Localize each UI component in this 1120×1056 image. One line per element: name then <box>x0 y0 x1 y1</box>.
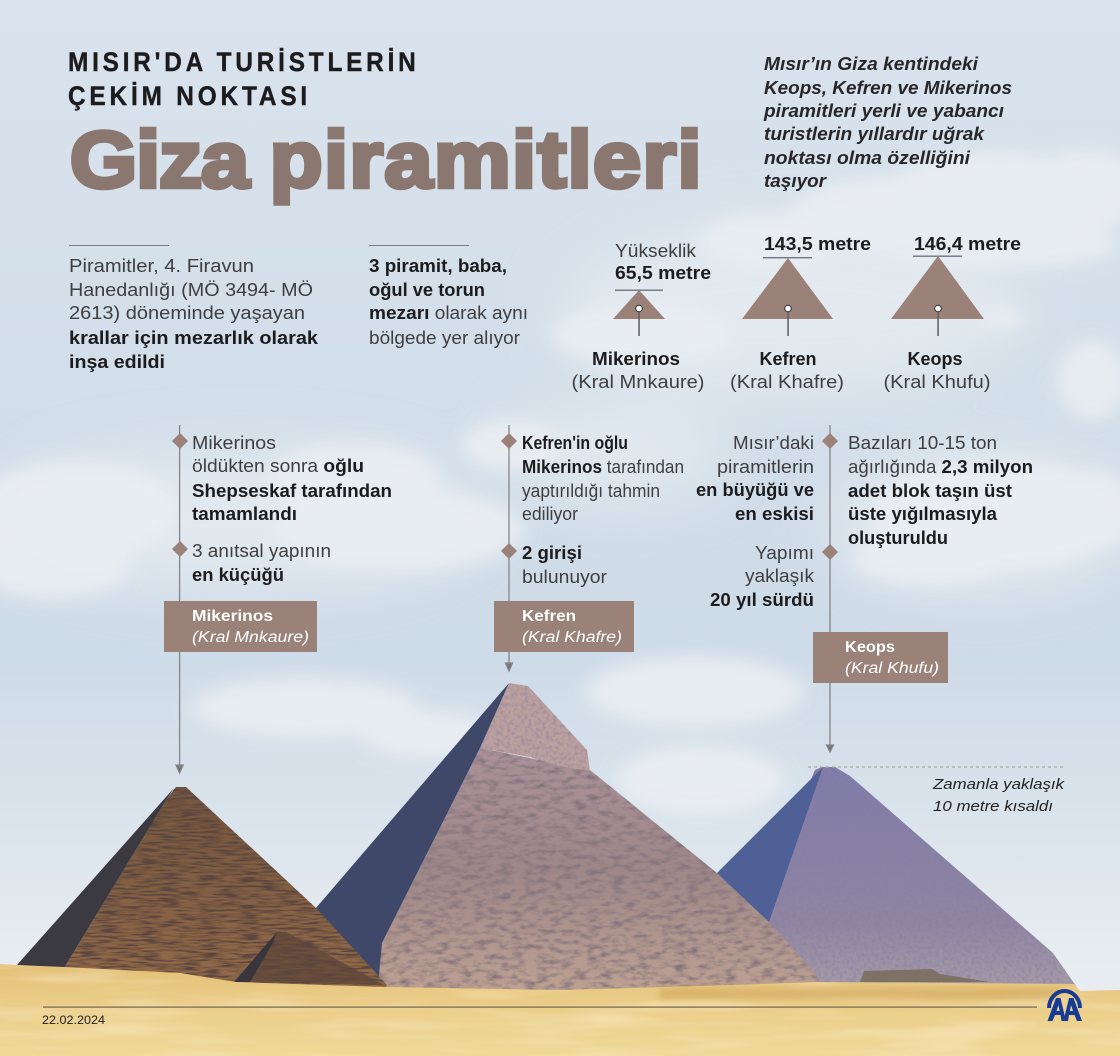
arrow down to Kefren <box>506 425 512 671</box>
text block: three pyramids: oğul ve torun <box>369 279 485 300</box>
intro paragraph: noktası olma özelliğini <box>764 148 971 168</box>
timeline: Mikerinos: Shepseskaf tarafından <box>192 481 392 501</box>
height comparison: Keops: Keops <box>908 348 962 369</box>
label box: Kefren: Kefren <box>522 608 576 625</box>
small satellite pyramid <box>250 932 384 985</box>
text block: dynasty <box>69 245 319 372</box>
main heading: Giza <box>70 115 250 204</box>
label box: Mikerinos: (Kral Mnkaure) <box>192 629 309 646</box>
Keops shadow face <box>717 767 823 930</box>
footer rule <box>43 1006 1037 1008</box>
callout: height loss: Zamanla yaklaşık <box>932 776 1066 793</box>
height comparison: Mikerinos: (Kral Mnkaure) <box>572 372 704 392</box>
height comparison: Kefren: (Kral Khafre) <box>730 372 844 392</box>
height comparison: Keops: (Kral Khufu) <box>884 372 990 392</box>
title <box>68 48 703 204</box>
intro paragraph: piramitleri yerli ve yabancı <box>763 101 1004 121</box>
timeline: Mikerinos: Mikerinos <box>192 433 276 453</box>
timeline: Kefren <box>494 425 684 671</box>
intro paragraph: turistlerin yıllardır uğrak <box>764 124 985 144</box>
background: clouds <box>0 150 1120 815</box>
callout: height loss: 10 metre kısaldı <box>933 798 1053 815</box>
timeline: Keops: en büyüğü ve <box>696 480 814 500</box>
darker sand band near horizon <box>660 988 1060 999</box>
timeline: Keops: Bazıları 10-15 ton <box>848 433 997 453</box>
text block: three pyramids: 3 piramit, baba, <box>369 255 507 276</box>
timeline: Kefren: 2 girişi <box>522 543 582 563</box>
label box: Mikerinos <box>164 601 317 652</box>
satellite shadow <box>234 932 277 982</box>
height comparison: Kefren: 143,5 metre <box>764 233 871 254</box>
timeline: Keops: Yapımı <box>755 543 814 563</box>
timeline: Keops: yaklaşık <box>745 566 815 586</box>
icon: AA logo <box>1048 991 1082 1021</box>
height comparison: Mikerinos: Yükseklik <box>615 241 697 261</box>
timeline: Keops: 20 yıl sürdü <box>710 590 814 610</box>
intro paragraph: Keops, Kefren ve Mikerinos <box>764 78 1012 98</box>
text block: dynasty: krallar için mezarlık olarak <box>69 327 319 348</box>
text block: dynasty: 2613) döneminde yaşayan <box>69 302 305 323</box>
timeline: Mikerinos: tamamlandı <box>192 504 297 524</box>
timeline: Kefren: Kefren'in oğlu <box>522 433 628 453</box>
text block: three pyramids: bölgede yer alıyor <box>369 327 520 348</box>
small ruins at foot of Keops <box>860 969 990 982</box>
timeline: Mikerinos: en küçüğü <box>192 565 284 585</box>
pyramid: Kefren <box>316 683 822 992</box>
timeline: Mikerinos: öldükten sonra oğlu <box>192 456 364 476</box>
label box: Kefren <box>494 601 634 652</box>
height comparison: Kefren <box>730 233 871 392</box>
main heading: piramitleri <box>270 115 703 204</box>
timeline: Keops: Mısır’daki <box>733 433 814 453</box>
timeline: Keops: üste yığılmasıyla <box>848 504 998 524</box>
kicker line 2: ÇEKİM NOKTASI <box>68 82 307 111</box>
timeline: Mikerinos: 3 anıtsal yapının <box>192 541 331 561</box>
kicker line 1: MISIR'DA TURİSTLERİN <box>68 48 416 77</box>
label box: Keops: (Kral Khufu) <box>845 660 939 677</box>
label box: Keops: Keops <box>845 639 895 656</box>
text block: dynasty: Hanedanlığı (MÖ 3494- MÖ <box>69 279 313 300</box>
arrow down to Keops <box>826 425 834 752</box>
timeline: Mikerinos <box>164 425 392 773</box>
height comparison: Mikerinos: Mikerinos <box>592 348 680 369</box>
height comparison: Keops: 146,4 metre <box>914 233 1021 254</box>
text block: dynasty: Piramitler, 4. Firavun <box>69 255 254 276</box>
height comparison: Mikerinos: 65,5 metre <box>615 262 711 283</box>
text block: dynasty: inşa edildi <box>69 351 165 372</box>
timeline: Kefren: yaptırıldığı tahmin <box>522 481 660 501</box>
arrow down to Mikerinos <box>176 425 183 773</box>
Kefren limestone cap <box>480 683 590 771</box>
Kefren shadow face <box>316 683 509 985</box>
timeline: Keops: piramitlerin <box>717 457 814 477</box>
height comparison: Keops <box>884 233 1021 392</box>
Mikerinos sunlit face <box>64 787 387 990</box>
height comparison: Mikerinos <box>572 241 711 392</box>
text block: three pyramids: mezarı olarak aynı <box>369 302 528 323</box>
intro paragraph <box>763 54 1012 191</box>
intro paragraph: Mısır’ın Giza kentindeki <box>764 54 979 74</box>
timeline: Keops: en eskisi <box>735 504 814 524</box>
label box: Kefren: (Kral Khafre) <box>522 629 622 646</box>
intro paragraph: taşıyor <box>764 171 827 191</box>
pyramid: Keops <box>717 767 1076 992</box>
text block: three pyramids <box>369 245 528 348</box>
pyramid: Mikerinos <box>17 787 387 990</box>
timeline: Kefren: bulunuyor <box>522 567 607 587</box>
timeline: Keops: adet blok taşın üst <box>848 481 1012 501</box>
label box: Mikerinos: Mikerinos <box>192 608 273 625</box>
date: 22.02.2024 <box>42 1013 105 1027</box>
timeline: Keops <box>696 425 1033 752</box>
desert sand <box>0 964 1120 1056</box>
Keops sunlit face <box>740 767 1076 992</box>
label box: Keops <box>813 632 948 683</box>
timeline: Kefren: Mikerinos tarafından <box>522 457 684 477</box>
Kefren sunlit face <box>370 748 822 992</box>
timeline: Kefren: ediliyor <box>522 504 578 524</box>
timeline: Keops: oluşturuldu <box>848 528 948 548</box>
timeline: Keops: ağırlığında 2,3 milyon <box>848 457 1033 477</box>
Mikerinos shadow face <box>17 788 174 968</box>
callout: height loss <box>808 767 1066 815</box>
height comparison: Kefren: Kefren <box>760 348 816 369</box>
